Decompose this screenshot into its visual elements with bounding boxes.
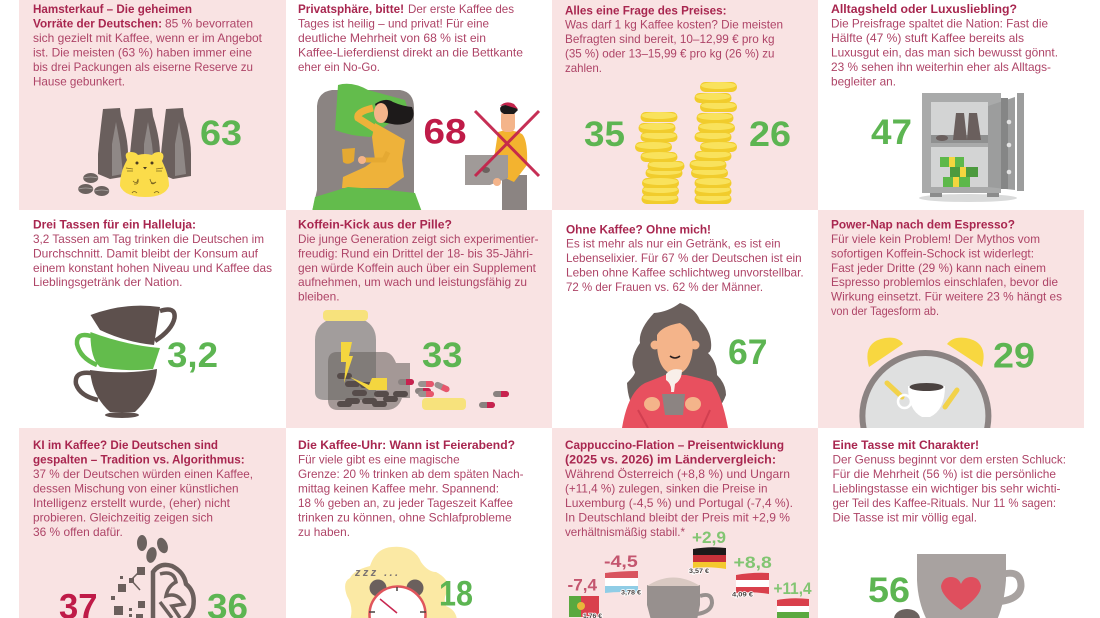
text: Power-Nap body [831,232,1062,318]
text: Alltagsheld body: begleiter an. [831,74,896,88]
text: Koffein-Kick body: gen würde Koffein auch über ein Supplement [298,261,537,275]
number: -4,5: -4,5 [604,552,638,571]
text: KI im Kaffee body: dessen Mischung von einer künstlichen [33,482,239,496]
text: Koffein-Kick body: bleiben. [298,290,340,304]
text: Privatsphäre body: Tages ist heilig – und privat! Für eine [298,16,489,30]
icon: open safe [919,93,1024,202]
label: price Germany: 3,57 € [689,568,709,575]
text: Hamsterkauf body: sich gezielt mit Kaffee, wenn er im Angebot [33,31,263,45]
icon: woman in bed [312,84,422,212]
text: Kaffee-Uhr body: 18 % geben an, zu jeder Tageszeit Kaffee [298,496,513,510]
text: Power-Nap body: Wirkung einsetzt. Für weitere 23 % hängt es [831,290,1062,304]
text: Hamsterkauf body: ist. Die meisten (63 %) haben immer eine [33,46,252,60]
icon: AI brain [111,565,194,618]
icon: flag Germany [693,547,726,569]
text: Koffein-Kick body: aufnehmen, um wach und leistungsfähig zu [298,275,527,289]
heading: Power-Nap: Power-Nap nach dem Espresso? [831,218,1015,232]
number: +11,4: +11,4 [774,579,812,598]
icon: falling coffee beans [137,535,170,564]
text: Drei Tassen body: einem konstant hohen Niveau und Kaffee das [33,261,272,275]
heading: Vorräte der Deutschen: Vorräte der Deutschen: [33,16,162,30]
icon: mug with heart [917,554,1021,618]
heading: Drei Tassen: Drei Tassen für ein Halleluja: [33,218,196,232]
text: Preisfrage body: Was darf 1 kg Kaffee kosten? Die meisten [565,18,783,32]
text: Tasse mit Charakter body: Lieblingstasse ein wichtiger bis sehr wichti- [832,482,1060,496]
text: Kaffee-Uhr body: Für viele gibt es eine magische [298,452,460,466]
text: Drei Tassen body: Lieblingsgetränk der Nation. [33,275,182,289]
panel: Hamsterkauf [19,0,286,210]
text: Preisfrage body: Befragten sind bereit, 10–12,99 € pro kg [565,32,774,46]
text: Privatsphäre body: deutliche Mehrheit von 68 % ist ein [298,31,486,45]
text: Tasse mit Charakter body: Die Tasse ist mir völlig egal. [832,510,977,524]
text: Hamsterkauf body: 85 % bevorraten [165,16,253,30]
text: Kaffee-Uhr body: Grenze: 20 % trinken ab dem späten Nach- [298,467,524,481]
text: Koffein-Kick body: freudig: Rund ein Drittel der 18- bis 35-Jähri- [298,246,533,260]
text: Drei Tassen body: Durchschnitt. Damit bleibt der Konsum auf [33,246,259,260]
number: +8,8: +8,8 [734,553,772,572]
number: 35: 35 [584,115,625,154]
icon: supplement jars and capsules [315,310,509,410]
text: Cappuccino-Flation body: Luxemburg (-4,5 %) und Portugal (-7,4 %). [565,496,793,510]
text: Cappuccino-Flation body: Während Österreich (+8,8 %) und Ungarn [565,467,790,481]
text: KI im Kaffee body: probieren. Gleichzeitig zeigen sich [33,510,213,524]
text: Koffein-Kick body [298,232,538,304]
heading: Cappuccino-Flation: (2025 vs. 2026) im Ländervergleich: [565,452,776,466]
text: Hamsterkauf body: Hause gebunkert. [33,74,125,88]
number: 63: 63 [200,114,242,153]
icon: delivery man [465,102,527,212]
text: Preisfrage body: (35 %) oder 13–15,99 € pro kg (26 %) zu [565,46,774,60]
panel: Koffein-Kick [286,210,552,428]
number: 3,2: 3,2 [167,336,218,375]
number: 56: 56 [868,571,910,610]
panel: Drei Tassen [19,210,286,428]
text: Koffein-Kick body: Die junge Generation zeigt sich experimentier- [298,232,538,246]
text: Ohne Kaffee body: Leben ohne Kaffee schlichtweg unvorstellbar. [566,266,804,280]
heading: Preisfrage: Alles eine Frage des Preises: [565,4,726,18]
panel: Alltagsheld [818,0,1084,210]
panel: Privatsphäre [286,0,552,212]
panel: Tasse mit Charakter [818,428,1084,618]
text: Alltagsheld body: Hälfte (47 %) stuft Kaffee bereits als [831,31,1024,45]
number: 26: 26 [749,115,791,154]
text: Power-Nap body: von der Tagesform ab. [831,304,939,318]
text: Kaffee-Uhr body: zu haben. [298,525,350,539]
text: Alltagsheld body: Die Preisfrage spaltet die Nation: Fast die [831,16,1048,30]
number: 29: 29 [993,336,1035,376]
icon: flag Hungary [777,598,809,618]
icon: coffee bags [98,108,191,179]
text: Ohne Kaffee body: 72 % der Frauen vs. 62 % der Männer. [566,280,763,294]
text: Ohne Kaffee body [566,236,804,294]
text: Drei Tassen body: 3,2 Tassen am Tag trinken die Deutschen im [33,232,264,246]
heading: Cappuccino-Flation: Cappuccino-Flation – Preisentwicklung [565,438,784,452]
text: Hamsterkauf body: bis drei Packungen als eiserne Reserve zu [33,60,253,74]
text: Cappuccino-Flation body [565,467,793,539]
text: KI im Kaffee body [33,467,253,539]
heading: KI im Kaffee: gespalten – Tradition vs. Algorithmus: [33,452,245,466]
icon: coffee beans [78,173,109,196]
icon: woman with coffee [622,303,728,428]
text: Privatsphäre body: eher ein No-Go. [298,60,380,74]
heading: Kaffee-Uhr: Die Kaffee-Uhr: Wann ist Feierabend? [298,438,515,452]
text: Power-Nap body: Espresso problemlos einschlafen, bevor die [831,275,1058,289]
text: Hamsterkauf body [33,16,263,88]
text: zzz: zzz ... [354,567,398,579]
text: Preisfrage body: zahlen. [565,61,602,75]
text: Kaffee-Uhr body: mittag keinen Kaffee mehr. Spannend: [298,482,499,496]
icon: red cross [475,111,539,176]
text: Kaffee-Uhr body: trinken zu können, ohne Schlafprobleme [298,510,512,524]
label: price Austria: 4,09 € [732,592,753,598]
heading: KI im Kaffee: KI im Kaffee? Die Deutschen sind [33,438,218,452]
text: KI im Kaffee body: 37 % der Deutschen würden einen Kaffee, [33,467,253,481]
text: KI im Kaffee body: 36 % offen dafür. [33,525,123,539]
heading: KI im Kaffee [33,438,245,466]
heading: Koffein-Kick: Koffein-Kick aus der Pille? [298,218,452,232]
icon: flag Luxembourg [605,571,638,593]
panel: Power-Nap [818,210,1084,479]
number: 18: 18 [439,574,473,614]
panel: Cappuccino-Flation [552,428,818,618]
panel: KI im Kaffee [19,428,286,618]
icon: stacked cups [76,306,175,418]
text: Cappuccino-Flation body: verhältnismäßig stabil.* [565,525,685,539]
text: Preisfrage body [565,18,783,75]
panel: Kaffee-Uhr [286,428,552,618]
text: Cappuccino-Flation body: In Deutschland bleibt der Preis mit +2,9 % [565,510,790,524]
number: 68: 68 [424,112,466,152]
number: 67: 67 [728,333,768,372]
text: Alltagsheld body: Luxusgut ein, das man sich bewusst gönnt. [831,46,1058,60]
icon: alarm clock with cup [862,338,988,479]
text: Privatsphäre body: Der erste Kaffee des [408,2,514,16]
text: Power-Nap body: Für viele kein Problem! Der Mythos vom [831,232,1040,246]
text: Power-Nap body: sofortigen Koffein-Schock ist widerlegt: [831,246,1034,260]
label: price Luxembourg: 3,78 € [621,590,641,596]
heading: Cappuccino-Flation [565,438,784,466]
text: Power-Nap body: Fast jeder Dritte (29 %) kann nach einem [831,261,1046,275]
icon: sleeping alarm clock [345,547,457,618]
text: Tasse mit Charakter body: Für die Mehrheit (56 %) ist die persönliche [832,467,1056,481]
text: Privatsphäre body: Kaffee-Lieferdienst direkt an die Bettkante [298,46,523,60]
panel: Preisfrage [552,0,818,210]
icon: coin stack left [635,112,684,204]
text: Drei Tassen body [33,232,272,289]
heading: Tasse mit Charakter: Eine Tasse mit Charakter! [832,438,979,452]
text: Ohne Kaffee body: Lebenselixier. Für 67 % der Deutschen ist ein [566,251,802,265]
heading: Privatsphäre: Privatsphäre, bitte! [298,2,404,16]
text: Cappuccino-Flation body: (+11,4 %) zulegen, sinken die Preise in [565,482,768,496]
text: Alltagsheld body: 23 % sehen ihn weiterhin eher als Alltags- [831,60,1051,74]
number: 47: 47 [871,113,912,152]
icon: coin stack right [690,82,737,204]
text: Tasse mit Charakter body [832,452,1066,524]
heading: Hamsterkauf: Hamsterkauf – Die geheimen [33,2,192,16]
text: Tasse mit Charakter body: ger Teil des Kaffee-Rituals. Nur 11 % sagen: [832,496,1056,510]
icon: hamster [120,152,169,197]
text: Alltagsheld body [831,16,1058,88]
icon: coffee bean beside mug [894,609,920,618]
text: Kaffee-Uhr body [298,452,524,539]
icon: flag Portugal [569,596,599,617]
text: Tasse mit Charakter body: Der Genuss beginnt vor dem ersten Schluck: [832,452,1066,466]
text: KI im Kaffee body: Intelligenz erstellt wurde, (eher) nicht [33,496,231,510]
number: +2,9: +2,9 [692,528,726,547]
heading: Ohne Kaffee: Ohne Kaffee? Ohne mich! [566,222,711,236]
number: 33: 33 [422,336,462,375]
text: Privatsphäre body [298,2,523,74]
text: Ohne Kaffee body: Es ist mehr als nur ein Getränk, es ist ein [566,236,780,250]
number: -7,4: -7,4 [568,576,598,595]
icon: cappuccino cup [647,578,712,618]
icon: flag Austria [736,573,769,594]
panel: Ohne Kaffee [552,210,818,428]
heading: Alltagsheld: Alltagsheld oder Luxusliebling? [831,2,1017,16]
